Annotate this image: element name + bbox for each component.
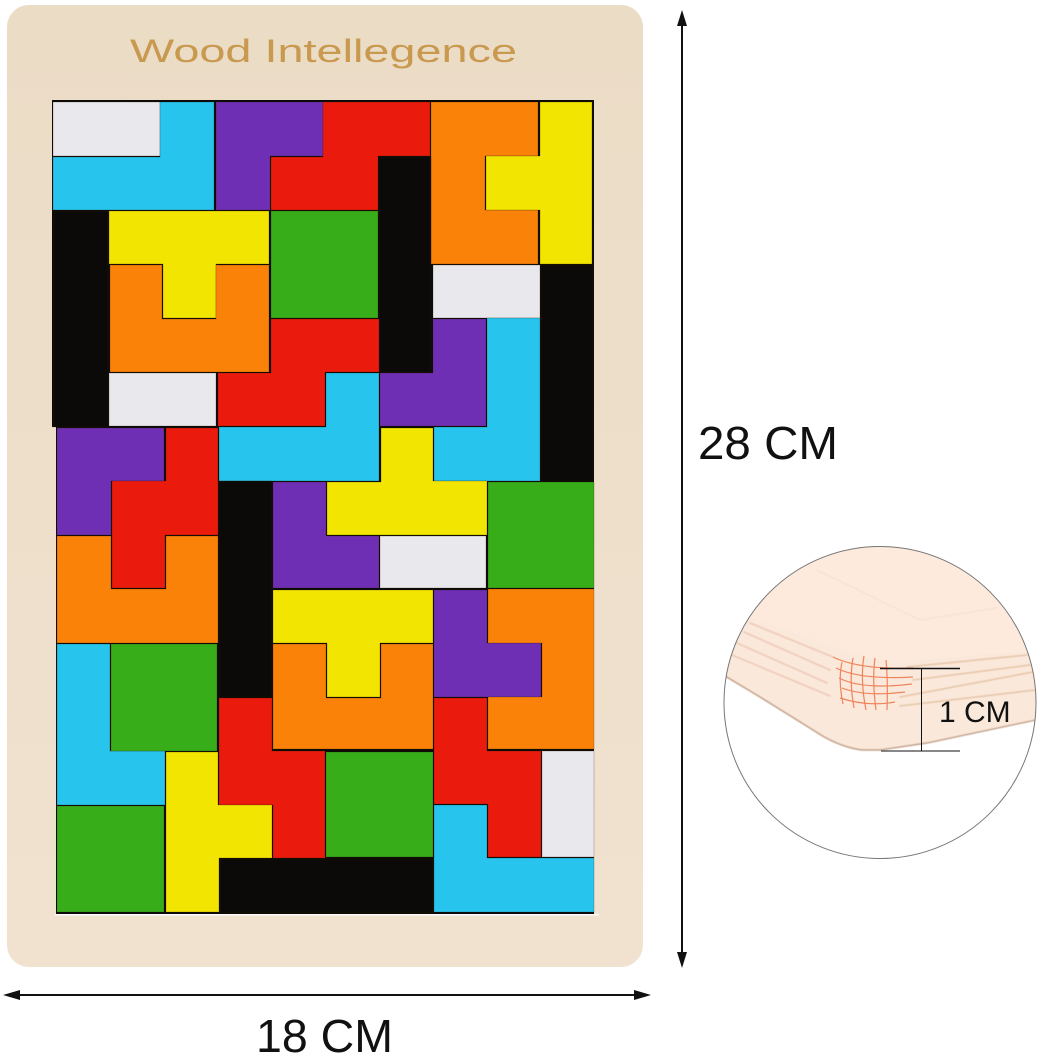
piece: black column centre — [379, 157, 431, 372]
piece: orange top-right — [431, 102, 538, 264]
piece: orange C lower right — [488, 589, 594, 749]
piece: cyan middle — [219, 373, 379, 481]
piece: green right — [488, 482, 594, 588]
piece: green bottom left — [57, 806, 164, 912]
wood grain — [725, 570, 1036, 750]
piece: cyan bottom right — [434, 805, 594, 912]
arrow: width dimension — [3, 990, 651, 1000]
side face — [720, 618, 1039, 750]
tray bottom highlight — [55, 914, 599, 916]
piece: yellow top-right — [486, 102, 592, 264]
piece: white top-left — [53, 102, 160, 156]
corner grid of plies — [833, 656, 913, 710]
arrow: height dimension — [677, 10, 687, 968]
piece: purple top — [216, 102, 323, 210]
label: 28 CM: 28 CM — [698, 417, 838, 469]
piece: orange U left — [57, 536, 218, 643]
piece: purple upper right — [380, 319, 486, 426]
wooden puzzle board — [7, 5, 643, 967]
piece: red lower right — [434, 698, 541, 857]
piece: white middle right — [380, 536, 486, 588]
piece: cyan lower left — [57, 644, 165, 805]
puzzle tray — [52, 100, 594, 914]
piece: red upper middle — [218, 319, 379, 426]
piece: black bottom — [220, 859, 433, 913]
piece: red top — [271, 102, 430, 210]
piece: green square upper — [271, 211, 378, 318]
board base — [7, 5, 643, 967]
coloured pieces — [53, 102, 594, 913]
piece: yellow T upper left — [109, 211, 269, 318]
piece: black column left — [54, 211, 108, 427]
piece: purple lower right — [434, 590, 541, 697]
piece: orange U upper left — [110, 265, 269, 372]
piece: yellow T lower — [273, 590, 433, 697]
piece: red left — [112, 428, 218, 588]
piece: yellow cross middle — [327, 428, 487, 535]
wood corner photo — [726, 547, 1036, 752]
thickness measure lines — [880, 668, 960, 751]
piece: purple middle — [273, 482, 379, 588]
piece: white upper right — [433, 265, 540, 318]
engraved title: Wood Intellegence — [130, 33, 517, 69]
piece: white left — [109, 373, 216, 426]
piece: purple left — [57, 428, 164, 535]
callout: board thickness detail — [720, 540, 1039, 860]
piece: white lower right — [542, 751, 594, 857]
piece: green lower left — [111, 644, 217, 751]
piece: orange U lower — [273, 644, 433, 749]
piece: cyan upper right — [434, 318, 540, 481]
piece: black column right — [541, 265, 593, 480]
board surface and edge — [749, 547, 1026, 662]
piece: yellow T bottom — [166, 752, 272, 912]
piece: black column middle — [219, 481, 272, 697]
piece: green lower middle — [326, 752, 433, 857]
piece: cyan top-left — [53, 102, 214, 210]
label: 1 CM: 1 CM — [939, 696, 1011, 729]
piece: red lower middle — [219, 698, 325, 858]
lens outline — [724, 546, 1036, 858]
